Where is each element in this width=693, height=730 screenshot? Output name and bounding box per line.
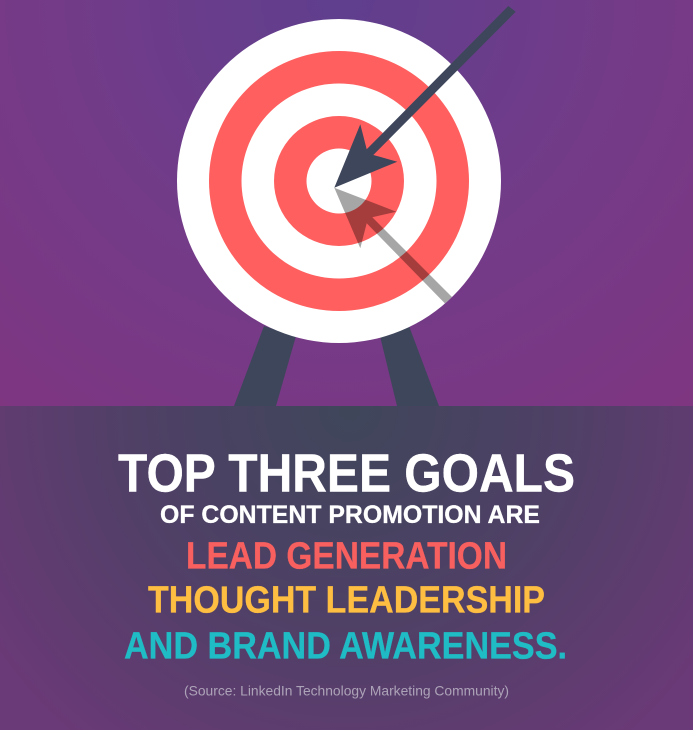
goal: brand awareness: AND BRAND AWARENESS. xyxy=(124,625,567,667)
arrow xyxy=(334,6,516,188)
arrow shadow xyxy=(334,188,452,304)
goal: thought leadership: THOUGHT LEADERSHIP xyxy=(148,580,545,622)
background xyxy=(0,0,693,406)
subheading: OF CONTENT PROMOTION ARE xyxy=(160,501,540,529)
source note: (Source: LinkedIn Technology Marketing Community) xyxy=(184,683,509,699)
target stand legs xyxy=(234,326,439,406)
bottom panel xyxy=(0,406,693,730)
heading: TOP THREE GOALS xyxy=(118,445,575,504)
target board xyxy=(177,19,501,343)
goal: lead generation: LEAD GENERATION xyxy=(186,536,507,578)
